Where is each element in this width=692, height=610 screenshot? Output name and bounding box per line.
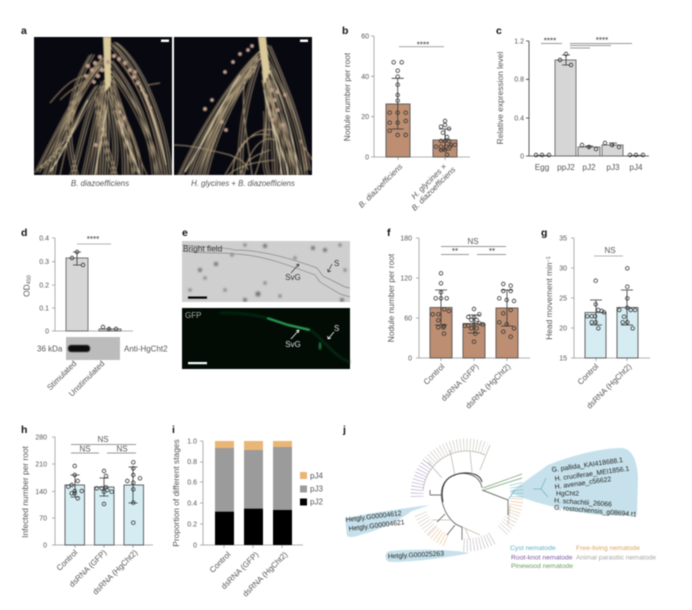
panel letter h: h xyxy=(21,424,27,436)
axes: 0.4 xyxy=(514,116,524,122)
error bars xyxy=(70,467,138,503)
annotation SvG: SvG xyxy=(285,340,301,349)
x labels: Egg xyxy=(535,163,550,172)
y axis title: Relative expression level xyxy=(495,52,505,144)
axes xyxy=(39,236,133,336)
annotation S: S xyxy=(334,324,339,333)
callout: left clade xyxy=(345,505,430,537)
axes: 0 xyxy=(520,154,524,160)
significance: NS xyxy=(467,237,479,246)
annotation S: S xyxy=(334,259,339,268)
cyst clade labels: H. schachtii_26066 xyxy=(554,498,612,509)
x labels: pJ2 xyxy=(582,163,596,172)
significance: **** xyxy=(596,36,608,45)
western blot xyxy=(66,337,120,360)
significance xyxy=(541,36,632,48)
axes: 0.3 xyxy=(39,259,49,266)
x labels xyxy=(55,548,140,597)
bars xyxy=(66,258,121,331)
tree legend xyxy=(510,545,656,570)
data points xyxy=(70,250,118,331)
axes: 0.2 xyxy=(39,282,49,290)
panel a: root photographs xyxy=(21,25,312,188)
axes: 0 xyxy=(193,542,197,550)
panel letter b: b xyxy=(342,25,348,37)
x labels: Control xyxy=(55,548,80,573)
axes: 0.6 xyxy=(187,480,197,486)
panel i: stacked bar chart xyxy=(171,424,323,599)
panel letter d: d xyxy=(21,227,27,239)
tree legend: Root-knot nematode xyxy=(511,554,573,562)
y axis: 20 xyxy=(361,114,369,121)
x labels: dsRNA (HgCht2) xyxy=(241,550,290,599)
panel letter e: e xyxy=(182,227,188,239)
caption right photo: H. glycines + B. diazoefficiens xyxy=(191,179,295,188)
callout: bottom clade xyxy=(386,550,470,562)
x labels: B. diazoefficiens xyxy=(410,165,457,213)
image: bright field xyxy=(182,241,350,302)
axes: 30 xyxy=(559,266,567,272)
stacked bars xyxy=(215,441,292,545)
x labels: Stimulated xyxy=(45,359,78,392)
x labels: B. diazoefficiens xyxy=(357,162,404,210)
x labels: Unstimulated xyxy=(67,359,106,398)
x labels: ppJ2 xyxy=(557,163,575,172)
x labels: Control xyxy=(576,362,601,387)
x labels xyxy=(357,162,457,213)
axes: 25 xyxy=(559,296,567,302)
blot size label: 36 kDa xyxy=(37,344,63,354)
x labels: pJ3 xyxy=(606,163,620,172)
tree legend: Free-living nematode xyxy=(576,545,640,552)
significance: NS xyxy=(79,444,91,454)
axes: 0 xyxy=(408,356,412,362)
axes: 120 xyxy=(400,276,412,282)
significance xyxy=(594,246,623,256)
axes: 280 xyxy=(35,434,47,442)
tree leaves xyxy=(417,445,517,545)
significance: NS xyxy=(97,435,109,444)
axes xyxy=(187,438,303,550)
annotation SvG: SvG xyxy=(285,273,301,282)
axes: 1.0 xyxy=(187,438,197,446)
x labels xyxy=(422,362,513,411)
y axis title: −1 xyxy=(546,256,552,262)
cyst clade labels: G. pallida_KAI418688.1 xyxy=(551,457,624,474)
legend xyxy=(300,472,323,506)
panel h: infected number chart xyxy=(20,424,153,597)
scale bar xyxy=(188,362,207,364)
x labels xyxy=(208,550,290,599)
data points xyxy=(66,460,142,524)
axes: 15 xyxy=(559,356,567,362)
panel b: nodule number bar chart xyxy=(342,25,470,213)
axes: 0.1 xyxy=(39,306,49,312)
y axis: 0 xyxy=(365,154,369,162)
x labels: dsRNA (HgCht2) xyxy=(464,362,513,411)
x labels xyxy=(45,359,106,398)
axes: 210 xyxy=(35,462,47,468)
bars xyxy=(430,308,518,358)
y axis title: Proportion of different stages xyxy=(171,439,181,547)
tree legend: Pinewood nematode xyxy=(511,563,573,570)
significance: ** xyxy=(489,247,495,256)
significance: NS xyxy=(604,246,616,255)
panel e: microscopy images xyxy=(182,227,350,369)
x labels: Control xyxy=(422,362,447,387)
error bars xyxy=(392,78,451,150)
error bars xyxy=(562,55,617,149)
y axis: 60 xyxy=(361,34,369,40)
panel c: relative expression bar chart xyxy=(495,25,649,172)
panel g: head movement chart xyxy=(541,227,650,411)
left clade labels: Hetgly.G00004612 xyxy=(345,510,402,524)
axes xyxy=(514,38,649,160)
photo: B. diazoefficiens roots xyxy=(34,37,172,176)
axes: 0.4 xyxy=(187,500,197,508)
bars xyxy=(386,104,457,157)
x labels: dsRNA (GFP) xyxy=(67,548,109,589)
y axis title: Head movement min xyxy=(544,262,554,340)
panel letter a: a xyxy=(21,25,27,37)
y axis xyxy=(361,34,470,162)
photo: H. glycines + B. diazoefficiens roots xyxy=(174,37,312,176)
y axis title: 450 xyxy=(26,275,32,284)
significance: **** xyxy=(417,40,429,50)
legend: pJ2 xyxy=(310,498,323,506)
panel j: phylogenetic tree xyxy=(342,424,656,570)
blot antibody label: Anti-HgCht2 xyxy=(124,344,168,354)
scale bar xyxy=(161,40,169,42)
x labels: dsRNA (GFP) xyxy=(439,362,481,403)
axes: 1.2 xyxy=(514,38,524,46)
panel letter f: f xyxy=(387,227,391,239)
axes: 20 xyxy=(559,326,567,332)
left clade labels: Hetgly.G00004621 xyxy=(348,519,405,533)
significance: **** xyxy=(87,235,99,244)
legend: pJ3 xyxy=(310,484,323,494)
data points xyxy=(586,266,637,330)
panel d: OD450 chart and western blot xyxy=(21,227,168,398)
significance xyxy=(441,237,506,256)
x labels xyxy=(535,163,643,172)
axes: 0.8 xyxy=(514,76,524,84)
axes xyxy=(35,434,153,550)
data points xyxy=(431,272,516,344)
y axis: 40 xyxy=(361,74,369,81)
error bars xyxy=(435,290,513,333)
label: Bright field xyxy=(183,244,223,254)
panel letter g: g xyxy=(541,227,547,239)
axes: 180 xyxy=(400,236,412,242)
significance: ** xyxy=(452,247,458,256)
axes: 140 xyxy=(35,489,47,496)
data points xyxy=(534,52,645,157)
arrow to S xyxy=(328,332,334,339)
x labels: H. glycines × xyxy=(410,162,449,201)
axes: 70 xyxy=(39,516,47,522)
legend: pJ4 xyxy=(310,472,323,480)
x labels: dsRNA (HgCht2) xyxy=(585,362,634,411)
error bars xyxy=(73,252,109,330)
axes: 0 xyxy=(45,328,49,336)
y axis title: Nodule number per root xyxy=(386,253,396,342)
data points xyxy=(388,60,457,156)
axes: 35 xyxy=(559,236,567,242)
bars xyxy=(585,308,638,358)
error bars xyxy=(590,290,633,325)
y axis title: Nodule number per root xyxy=(342,52,352,141)
axes xyxy=(559,236,650,362)
scale bar xyxy=(188,296,207,299)
tree branches xyxy=(423,445,548,540)
axes: 0.4 xyxy=(39,236,49,242)
significance: **** xyxy=(544,36,556,46)
arrow to SvG xyxy=(291,264,299,273)
axes xyxy=(400,236,530,362)
axes: 60 xyxy=(404,316,412,322)
arrow to S xyxy=(328,264,332,272)
caption left photo: B. diazoefficiens xyxy=(71,179,129,188)
bars xyxy=(65,485,144,545)
panel f: nodule number dsRNA chart xyxy=(386,227,530,411)
axes: 0.2 xyxy=(187,522,197,528)
axes: 0 xyxy=(43,542,47,550)
x labels: dsRNA (GFP) xyxy=(219,550,261,591)
bars xyxy=(536,60,643,156)
arrow to SvG xyxy=(291,330,299,339)
significance xyxy=(71,435,136,454)
cyst clade labels xyxy=(551,457,637,519)
cyst clade labels: HgCht2 xyxy=(556,490,579,498)
callout: cyst nematode clade xyxy=(510,448,638,516)
panel letter i: i xyxy=(172,424,175,436)
label: GFP xyxy=(185,311,201,320)
left clade labels xyxy=(345,510,405,533)
x labels: pJ4 xyxy=(629,163,643,172)
scale bar xyxy=(300,40,308,42)
image: GFP xyxy=(182,308,350,369)
x labels: Control xyxy=(208,550,233,575)
axes: 0.8 xyxy=(187,459,197,466)
y axis title: Infected number per root xyxy=(20,445,30,538)
tree legend: Cyst nematode xyxy=(510,545,556,552)
significance xyxy=(77,235,111,244)
cyst clade labels: H. avenae_c56622 xyxy=(554,476,612,491)
bottom clade label: Hetgly.G00025263 xyxy=(388,551,444,560)
panel letter c: c xyxy=(496,25,502,37)
cyst clade labels: G. rostochiensis_g08694.t1 xyxy=(554,505,637,519)
significance xyxy=(399,40,444,50)
tree legend: Animal parasitic nematode xyxy=(576,554,656,562)
significance: NS xyxy=(116,444,128,454)
panel letter j: j xyxy=(342,424,346,436)
y axis title: OD xyxy=(22,284,32,297)
x labels: dsRNA (HgCht2) xyxy=(91,548,140,597)
cyst clade labels: H. cruciferae_MEI1856.1 xyxy=(554,466,630,483)
